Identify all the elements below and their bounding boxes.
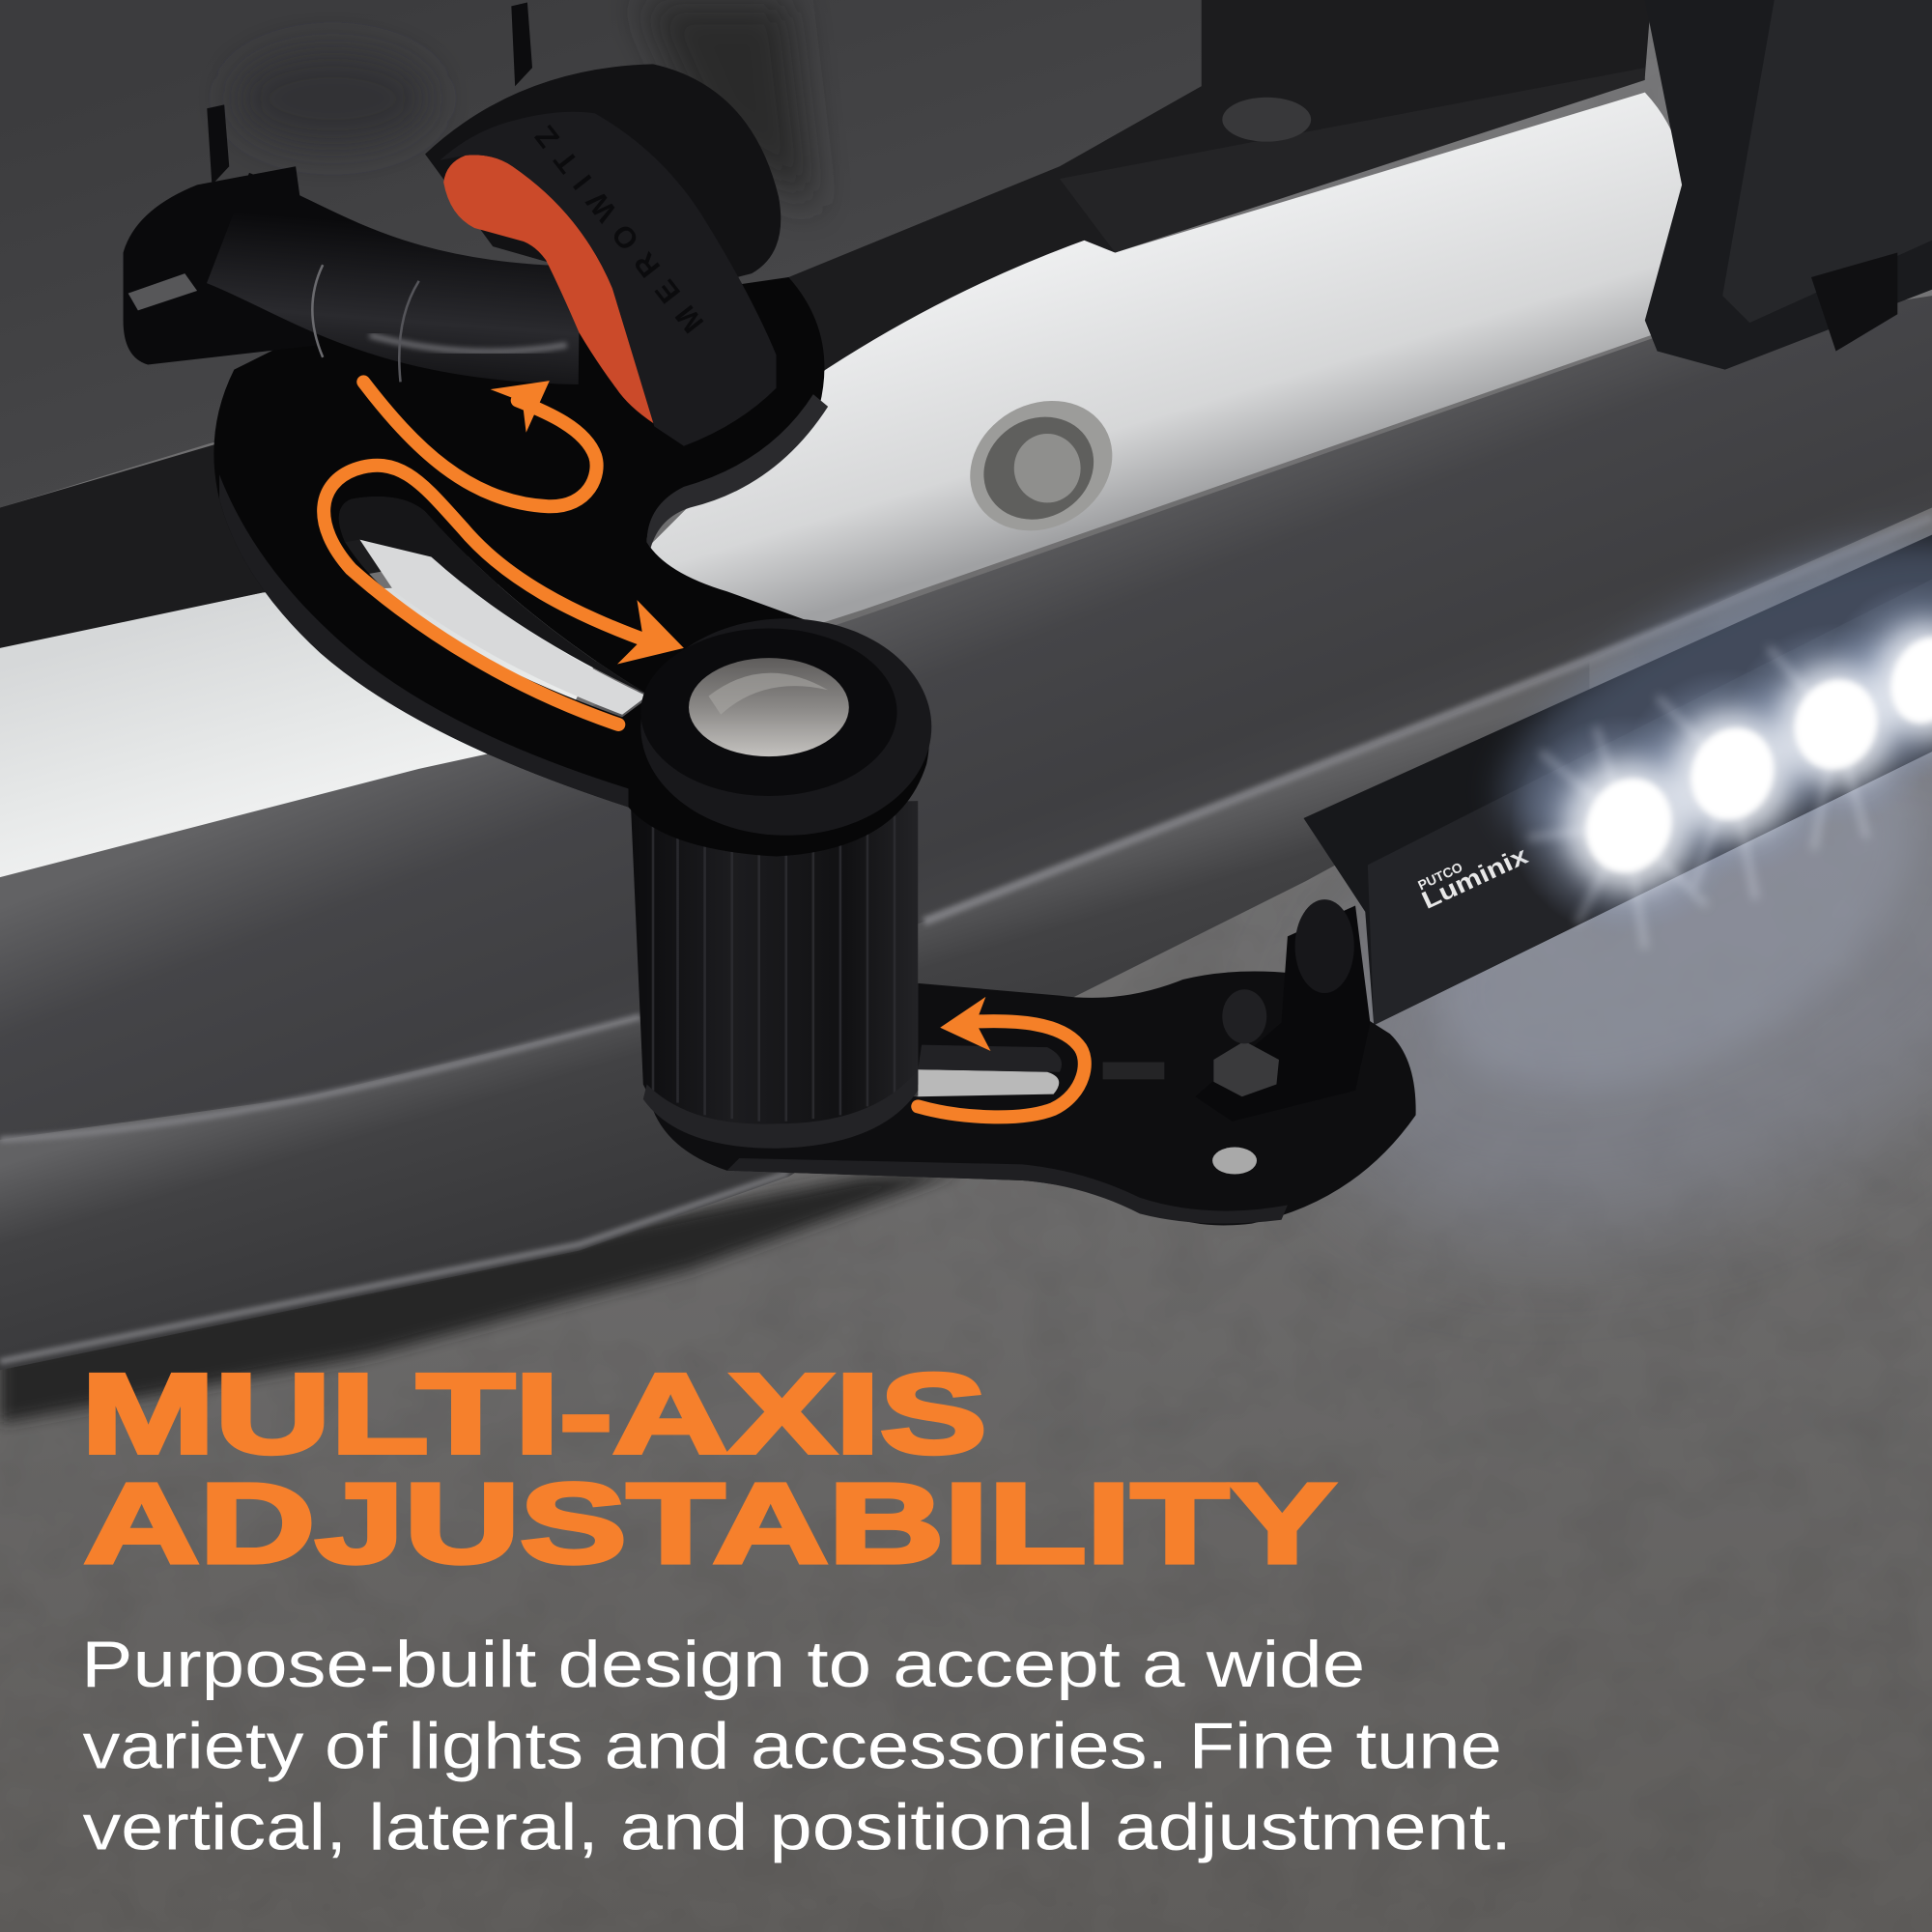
Luminix brand text: PUTCO: [1415, 859, 1465, 893]
shackle orange-red pad: [443, 155, 654, 424]
lower bumper lower highlight: [0, 1173, 788, 1361]
slot inner wall: [339, 497, 650, 696]
LED glow: [1509, 582, 1932, 936]
LED star rays: [1528, 647, 1866, 949]
ribbed cylinder: [631, 801, 918, 1149]
arrow: slot travel: [324, 466, 684, 724]
shackle black pad with lettering: [440, 112, 777, 446]
trim button: [1222, 98, 1311, 142]
mounting hole: [1212, 1148, 1257, 1175]
shackle tube: [228, 228, 579, 382]
upper bumper panel: [0, 296, 1932, 1140]
lower bracket plate: [647, 972, 1416, 1225]
light bar: [1303, 479, 1932, 1164]
angle mount and bolt: [1195, 906, 1370, 1122]
white painted bumper right: [616, 93, 1683, 666]
parking sensor: [947, 376, 1136, 556]
edge of plate near sensor: [647, 394, 828, 549]
body text: vertical, lateral, and positional adjustment.: [82, 1792, 1512, 1864]
Luminix brand text: [1413, 832, 1532, 915]
lower bumper panel: [0, 653, 1589, 1370]
body text: Purpose-built design to accept a wide: [81, 1629, 1365, 1701]
bracket edge highlight: [219, 474, 629, 807]
arrow: upper rotation: [363, 381, 597, 506]
light spill on ground: [1233, 577, 1932, 1345]
body text: variety of lights and accessories. Fine tune: [82, 1710, 1502, 1782]
LED lamps: [1572, 626, 1932, 886]
body text: [81, 1629, 1512, 1864]
upper bracket plate: [213, 277, 929, 856]
dome bolt: [689, 658, 849, 756]
blue tint above bar: [1463, 479, 1932, 901]
bracket slot see-through white: [359, 540, 647, 715]
upper grey bumper panel: [0, 0, 1202, 508]
light bar housing: [1303, 535, 1932, 1025]
white painted bumper left: [0, 579, 640, 877]
panel shadow blobs: [234, 0, 813, 210]
title: [81, 1350, 1336, 1586]
shaft washer: [640, 618, 931, 836]
mount clips: [207, 3, 532, 185]
shackle black pad with lettering: MEROWITZ: [528, 120, 710, 339]
LED halo: [1567, 623, 1932, 890]
shadow below bumper: [0, 1171, 961, 1423]
right dark housing: [1645, 0, 1932, 370]
light bar spill rays: [1378, 660, 1932, 1164]
lower bracket slot: [918, 1069, 1059, 1096]
black trim strip: [0, 0, 1651, 648]
Luminix brand text: Luminix: [1418, 842, 1532, 915]
shackle rear loop: [425, 64, 781, 296]
arrow: lower pivot: [918, 997, 1085, 1117]
lower bracket: [647, 899, 1416, 1225]
bumper crease highlights: [0, 518, 1932, 1140]
title: ADJUSTABILITY: [84, 1460, 1336, 1586]
title: MULTI-AXIS: [81, 1350, 987, 1477]
mount metal glint: [128, 273, 197, 310]
tow shackle mount: [124, 166, 321, 365]
